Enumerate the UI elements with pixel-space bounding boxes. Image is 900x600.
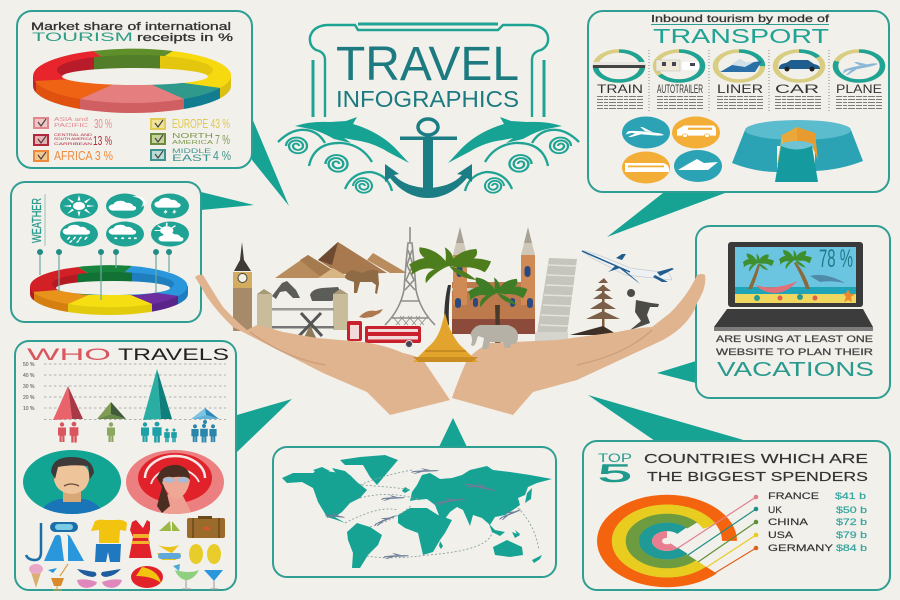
market share heading — [31, 21, 233, 44]
title emblem — [278, 24, 579, 198]
transport heading — [651, 13, 829, 48]
market share heading: TOURISM — [32, 32, 133, 44]
map: routes and planes — [325, 468, 539, 559]
panel: weather — [11, 182, 201, 322]
mode labels: CAR — [775, 82, 820, 96]
spending values: $41 b — [835, 491, 866, 502]
spending values: $84 b — [836, 543, 867, 554]
pyramids — [275, 242, 407, 278]
panel: top five spenders — [579, 441, 890, 599]
mode captions (illegible fine print) — [597, 96, 882, 108]
panel: who travels — [15, 341, 236, 590]
mode labels: TRAIN — [597, 82, 643, 96]
pointer: world map — [439, 418, 467, 447]
country list: GERMANY — [768, 543, 833, 553]
map: continents — [282, 455, 552, 568]
rider and bull silhouettes — [272, 281, 340, 301]
legend: MIDDLE — [172, 149, 211, 155]
top five heading: COUNTRIES WHICH ARE — [644, 452, 868, 466]
icon: pink sunglasses — [77, 579, 122, 588]
axis labels: 40 % — [23, 373, 35, 379]
beach items — [26, 516, 225, 590]
big ben — [233, 242, 252, 331]
spending values: $50 b — [836, 505, 867, 516]
legend: 13 % — [93, 133, 112, 148]
top five heading: TOP — [598, 453, 632, 465]
kangaroo — [359, 309, 383, 318]
panel: laptop — [696, 226, 890, 398]
legend: AFRICA 3 % — [54, 148, 113, 163]
pointer: transport — [607, 193, 725, 237]
people icons — [58, 420, 217, 443]
top five heading: 5 — [598, 460, 632, 488]
legend: CARRIBEAN — [54, 141, 92, 146]
legend: AMERICA — [172, 140, 214, 146]
left hand — [195, 275, 450, 415]
donut: liner — [716, 51, 762, 81]
phone box — [347, 321, 362, 341]
pointer: market share — [252, 118, 289, 206]
icon: beach ball — [131, 566, 163, 588]
who travels heading: WHO — [27, 345, 111, 364]
icon: train disc — [622, 152, 670, 184]
portrait: man — [23, 450, 121, 520]
icon: shorts — [95, 544, 121, 562]
icon: suitcase — [187, 516, 225, 538]
elephant — [470, 325, 518, 349]
windmill — [299, 313, 322, 342]
icon: diving mask — [50, 522, 78, 532]
laptop caption: WEBSITE TO PLAN THEIR — [716, 347, 874, 357]
country list: UK — [768, 505, 782, 515]
top five heading: THE BIGGEST SPENDERS — [647, 470, 868, 484]
donut: autotrailer — [656, 51, 702, 81]
icon: flip flops — [189, 544, 221, 564]
laptop caption — [716, 334, 874, 381]
legend: NORTH — [172, 131, 213, 140]
icon: laptop — [714, 242, 873, 331]
spending values: $72 b — [836, 517, 867, 528]
right dolphin and waves — [448, 117, 579, 193]
legend: 30 % — [94, 116, 112, 131]
icon: bus disc — [672, 116, 720, 148]
icon: cloud and lightning — [154, 198, 181, 215]
axis labels: 10 % — [23, 406, 35, 412]
right hand — [452, 274, 705, 415]
panel: transport — [588, 11, 889, 192]
eiffel tower — [385, 227, 435, 325]
market share heading: Market share of international — [31, 21, 231, 33]
pointer: top five — [588, 395, 747, 441]
icon: sun — [63, 195, 95, 217]
country list: CHINA — [768, 517, 808, 527]
title: INFOGRAPHICS: INFOGRAPHICS — [336, 86, 519, 112]
mode labels: LINER — [717, 82, 763, 96]
pointer: who travels — [237, 399, 292, 452]
leaning tower — [535, 258, 577, 341]
weather icons — [60, 194, 189, 246]
icon: bikini bottom — [157, 545, 181, 560]
bali pagoda — [570, 278, 620, 342]
legend: 7 % — [215, 132, 230, 147]
chart: 3D cylinder — [732, 120, 863, 182]
icon: sun behind cloud — [155, 223, 183, 242]
title: TRAVEL: TRAVEL — [336, 38, 519, 91]
church — [452, 227, 535, 334]
icon: tropical drink — [48, 564, 68, 590]
who travels heading — [27, 345, 229, 364]
mode labels: PLANE — [836, 82, 882, 96]
chart leader lines — [678, 495, 758, 573]
icon: ship disc — [674, 150, 722, 182]
spending values — [835, 491, 867, 554]
icon: snorkel — [26, 523, 41, 560]
transport heading: TRANSPORT — [653, 26, 829, 48]
icon: rain — [63, 225, 90, 243]
golden stupa — [413, 313, 478, 362]
axis labels: 30 % — [23, 384, 35, 390]
discus thrower — [627, 289, 659, 330]
icon: blue sunglasses — [77, 569, 121, 577]
portrait: woman — [126, 450, 224, 516]
who travels heading: TRAVELS — [118, 345, 229, 364]
left dolphin and waves — [278, 117, 409, 193]
pyramid bars — [53, 369, 219, 420]
icon: swimsuit — [129, 520, 152, 558]
legend: SOUTH AMERICA — [54, 137, 93, 141]
emblem frame — [310, 24, 548, 117]
icon: anchor — [385, 119, 472, 198]
beach scene — [743, 250, 855, 302]
donut: car — [776, 51, 822, 81]
plane over landmarks — [582, 251, 674, 284]
country list: FRANCE — [768, 491, 819, 501]
market share heading: receipts in % — [137, 32, 233, 44]
icon: fins — [44, 534, 84, 561]
camel — [345, 270, 379, 294]
statistic: 78 %: 78 % — [819, 245, 853, 273]
legend: 4 % — [213, 148, 231, 163]
mode labels — [597, 82, 882, 96]
country list — [768, 491, 833, 553]
icon: plane disc — [622, 116, 670, 148]
country list: USA — [768, 530, 793, 540]
laptop caption: ARE USING AT LEAST ONE — [716, 334, 873, 344]
pointer: laptop — [657, 361, 696, 383]
icon: t-shirt — [91, 520, 127, 543]
legend: EUROPE 43 % — [172, 116, 230, 131]
icon: cloud and moon — [109, 196, 146, 211]
weather heading: WEATHER — [30, 198, 44, 243]
legend: ASIA and — [54, 117, 88, 123]
legend: EAST — [172, 153, 212, 163]
icon: bikini top — [159, 521, 180, 531]
icon: cocktail blue — [204, 570, 223, 589]
donut: plane — [836, 51, 882, 81]
legend — [34, 116, 231, 163]
pointer: weather — [201, 192, 254, 210]
icon: ice cream — [29, 564, 43, 588]
pin lines — [40, 252, 169, 300]
radial bar chart — [579, 483, 755, 599]
laptop caption: VACATIONS — [717, 359, 874, 381]
panel: world map — [273, 447, 556, 577]
central illustration: landmarks in hands — [195, 227, 705, 415]
tower bridge — [257, 289, 348, 330]
icon: cocktail green — [173, 564, 199, 589]
donut chart: weather — [30, 265, 188, 315]
spending values: $79 b — [836, 530, 867, 541]
palm trees — [409, 247, 527, 345]
panel: market share — [17, 11, 252, 168]
double decker bus — [365, 326, 421, 348]
donut: train — [593, 51, 645, 81]
axis labels: 50 % — [23, 362, 35, 368]
icon: snow — [109, 225, 137, 239]
legend: PACIFIC — [54, 123, 88, 129]
axis labels: 20 % — [23, 395, 35, 401]
top five heading — [598, 452, 868, 488]
transport heading: Inbound tourism by mode of — [651, 13, 829, 25]
dotted separators — [649, 50, 829, 112]
axis labels — [23, 362, 35, 412]
mode labels: AUTOTRAILER — [657, 82, 703, 96]
donut chart: market share — [30, 49, 232, 115]
legend: CENTRAL AND — [54, 133, 93, 137]
